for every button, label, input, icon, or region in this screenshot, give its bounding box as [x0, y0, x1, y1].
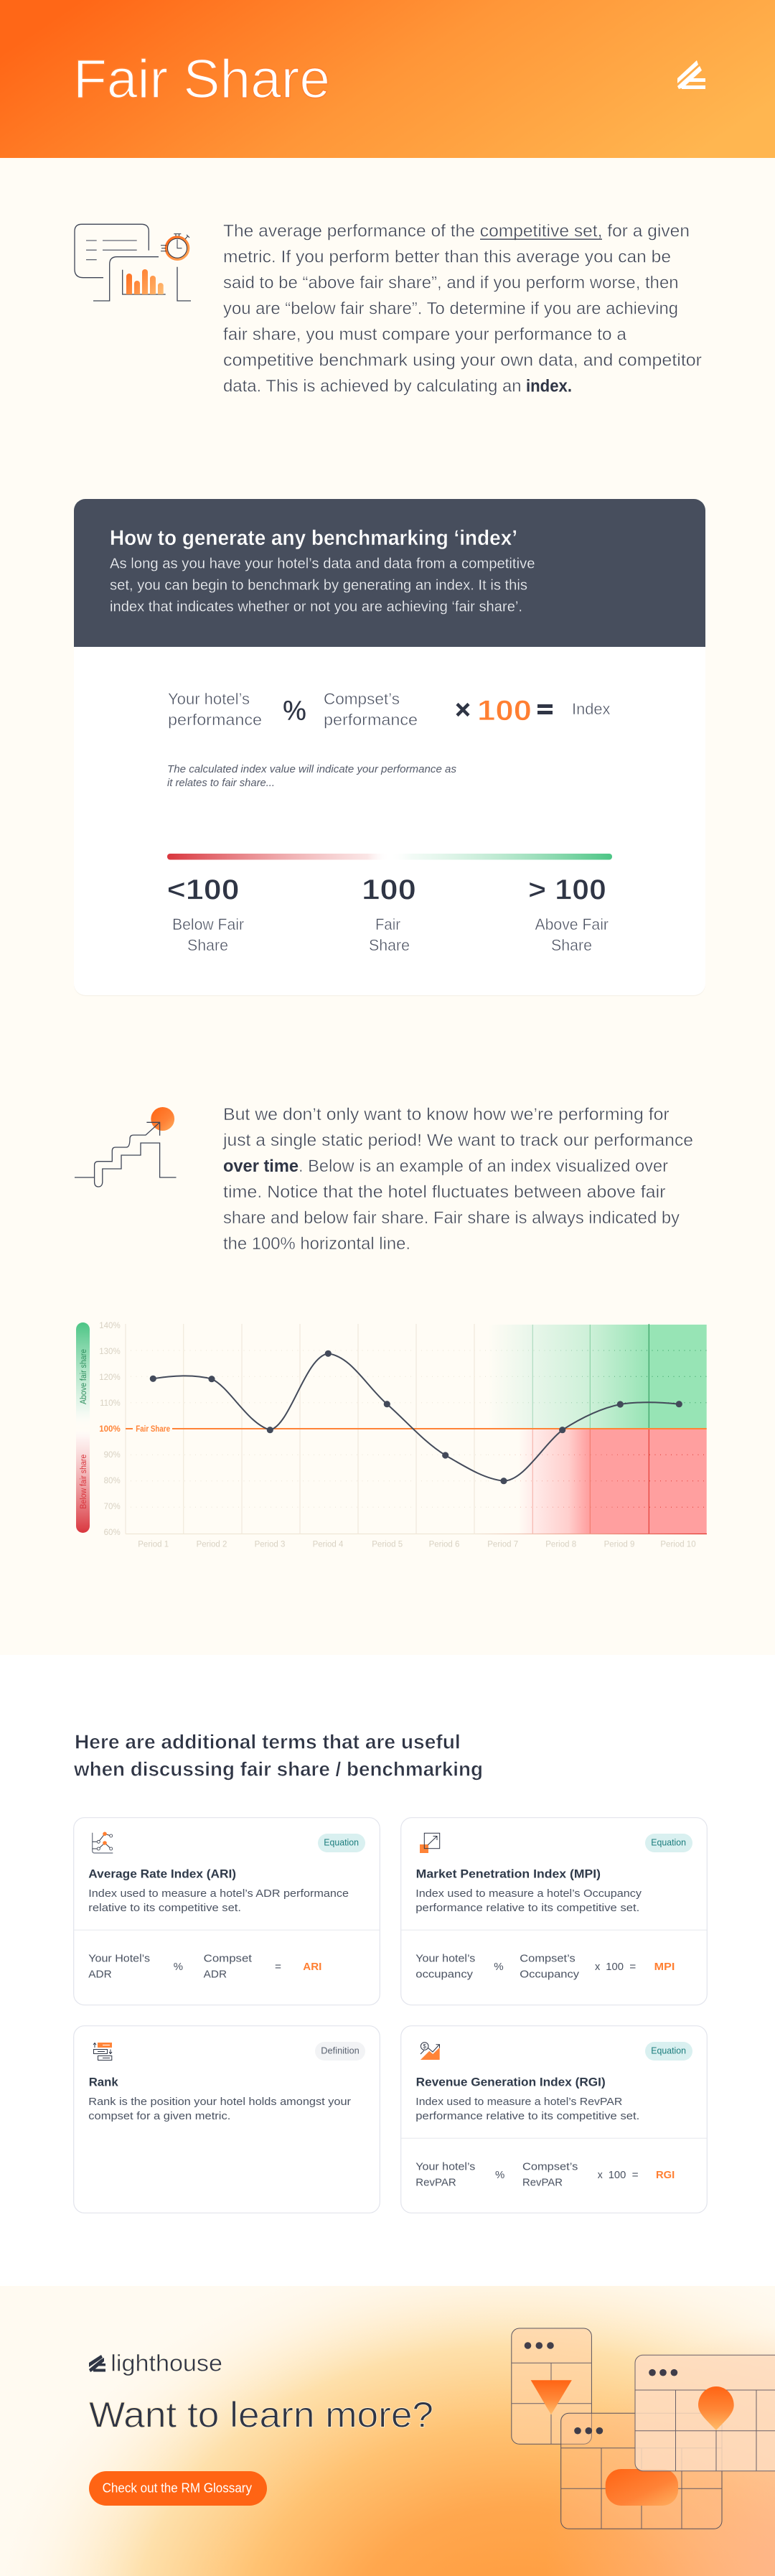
equation: RGI: RevPAR	[522, 2177, 563, 2189]
button: check out the RM glossary: Check out the RM Glossary	[103, 2481, 252, 2496]
equation: MPI: Occupancy	[520, 1969, 580, 1981]
index formula: 100	[477, 695, 532, 727]
x axis labels: Period 10	[660, 1541, 696, 1549]
y axis labels: 80%	[104, 1477, 121, 1485]
tag: equation	[318, 1834, 365, 1852]
y axis labels: 60%	[104, 1529, 121, 1537]
index formula: %	[283, 695, 306, 727]
tag: equation	[645, 2042, 692, 2061]
tag: definition	[315, 2042, 365, 2061]
tag: equation: Equation	[651, 1837, 686, 1848]
equation: RGI: %	[495, 2169, 504, 2181]
text block: definition: metric. If you perform better than this average you can be	[223, 247, 671, 266]
equation: RGI: Compset’s	[522, 2161, 578, 2173]
text block: over time: just a single static period! We want to track our performance	[222, 1131, 693, 1150]
panel header: set, you can begin to benchmark by generating an index. It is this	[110, 577, 527, 593]
scale: above fair share	[528, 874, 609, 954]
y axis labels: 130%	[99, 1348, 121, 1356]
icon: revenue chart	[421, 2043, 440, 2060]
illustration: window with rounded block	[561, 2413, 722, 2529]
text block: definition: said to be “above fair share”, and if you perform worse, then	[223, 273, 679, 292]
scale: below fair share: <100	[167, 874, 240, 906]
index formula	[168, 690, 610, 729]
equation: ARI: ADR	[88, 1969, 112, 1981]
scale: fair share: 100	[362, 874, 416, 906]
card: average rate index	[74, 1818, 380, 2005]
equation: ARI: Compset	[204, 1953, 253, 1965]
note: calculated index: it relates to fair share...	[167, 777, 275, 789]
text block: definition: fair share, you must compare your performance to a	[223, 325, 627, 344]
equation: ARI: Your Hotel’s	[88, 1953, 150, 1965]
tag: equation: Equation	[324, 1837, 359, 1848]
x axis labels: Period 1	[138, 1541, 169, 1549]
card: market penetration index: Market Penetration Index (MPI)	[416, 1867, 601, 1880]
equation: RGI: 100	[609, 2169, 626, 2181]
equation: RGI: Your hotel’s	[415, 2161, 475, 2173]
text block: definition: index.	[526, 376, 572, 396]
icon: line chart points	[93, 1832, 113, 1853]
equation: ARI: %	[174, 1961, 183, 1973]
x axis labels: Period 2	[197, 1541, 227, 1549]
card: average rate index: Index used to measure a hotel’s ADR performance	[88, 1887, 349, 1900]
logo: lighthouse: lighthouse	[111, 2351, 222, 2376]
equation: MPI	[415, 1953, 675, 1981]
above and below legend pill: Below fair share	[80, 1455, 88, 1509]
text block: definition: competitive benchmark using your own data, and competitor	[223, 350, 702, 370]
y axis labels: 90%	[104, 1451, 121, 1460]
red to green scale bar	[167, 854, 612, 860]
equation: ARI: =	[275, 1961, 281, 1973]
card: market penetration index: Index used to measure a hotel’s Occupancy	[415, 1887, 642, 1900]
text block: over time: . Below is an example of an index visualized over	[299, 1157, 668, 1176]
tag: equation	[645, 1834, 692, 1852]
intro section	[75, 221, 702, 396]
card: market penetration index	[401, 1818, 707, 2005]
panel header	[74, 499, 705, 647]
equation: RGI: =	[632, 2169, 639, 2181]
y axis labels	[99, 1322, 121, 1537]
text block: definition	[223, 221, 702, 396]
x axis labels: Period 6	[429, 1541, 459, 1549]
x axis labels: Period 8	[545, 1541, 576, 1549]
green solid fill	[649, 1325, 707, 1429]
equation: MPI: =	[629, 1961, 637, 1973]
equation: MPI: Compset’s	[520, 1953, 576, 1965]
scale: below fair share: Share	[187, 936, 228, 954]
card: rank: Rank	[89, 2075, 118, 2089]
text block: definition: data. This is achieved by calculating an	[223, 376, 522, 396]
icon: lighthouse logo white	[677, 60, 705, 89]
tag: equation: Equation	[651, 2045, 686, 2056]
card: market penetration index: performance relative to its competitive set.	[415, 1902, 639, 1914]
text block: over time: share and below fair share. Fair share is always indicated by	[223, 1208, 680, 1228]
scale: fair share: Fair	[375, 915, 400, 933]
card: revenue generation index: Revenue Generation Index (RGI)	[416, 2075, 606, 2089]
equation: RGI: RevPAR	[415, 2177, 456, 2189]
card: average rate index: Average Rate Index (ARI)	[88, 1867, 236, 1880]
above and below legend pill	[76, 1322, 90, 1533]
button: check out the RM glossary	[89, 2471, 267, 2506]
icon: report and stopwatch illustration	[75, 224, 191, 301]
x axis labels: Period 9	[604, 1541, 634, 1549]
fair share line: Fair Share	[136, 1425, 170, 1434]
green gradient fill	[488, 1325, 649, 1429]
text block: over time: time. Notice that the hotel fluctuates between above fair	[223, 1182, 666, 1202]
card: rank: compset for a given metric.	[88, 2110, 230, 2122]
note: calculated index	[167, 763, 456, 789]
index formula: Compset’s	[324, 690, 400, 708]
index formula: Index	[572, 700, 610, 718]
equation: ARI: ARI	[303, 1961, 321, 1973]
card: rank	[74, 2026, 380, 2213]
equation: MPI: %	[494, 1961, 504, 1973]
performance curve	[150, 1350, 682, 1484]
scale: fair share: Share	[369, 936, 410, 954]
y axis labels: 140%	[99, 1322, 121, 1330]
tag: definition: Definition	[321, 2045, 360, 2056]
text block: over time: over time	[223, 1157, 299, 1176]
section: tracking over time	[75, 1105, 693, 1254]
y axis labels: 70%	[104, 1503, 121, 1511]
icon: stairs with arrow	[75, 1107, 177, 1187]
y axis labels: 110%	[100, 1399, 121, 1408]
equation: MPI: Your hotel’s	[415, 1953, 475, 1965]
red gradient fill	[518, 1429, 590, 1534]
card: rank: Rank is the position your hotel holds amongst your	[88, 2096, 351, 2108]
panel header: index that indicates whether or not you are achieving ‘fair share’.	[110, 599, 522, 615]
y axis labels: 120%	[99, 1373, 121, 1382]
equation: MPI: 100	[606, 1961, 624, 1973]
scale: above fair share: Above Fair	[535, 915, 609, 933]
x axis labels: Period 3	[255, 1541, 285, 1549]
icon: revenue chart: $	[423, 2043, 426, 2050]
illustration: window with drop	[635, 2355, 775, 2471]
text block: definition: The average performance of the competitive set, for a given	[223, 221, 690, 241]
scale: above fair share: > 100	[528, 874, 606, 906]
index formula: Your hotel’s	[168, 690, 250, 708]
y axis labels: 100%	[99, 1425, 121, 1434]
x axis labels: Period 7	[487, 1541, 518, 1549]
scale: above fair share: Share	[551, 936, 592, 954]
card: revenue generation index	[401, 2026, 707, 2213]
card: revenue generation index: performance relative to its competitive set.	[415, 2110, 639, 2122]
panel: how to generate an index	[74, 499, 705, 997]
line chart: index over time	[76, 1322, 707, 1549]
title: Fair Share	[73, 49, 330, 110]
heading: additional terms: Here are additional terms that are useful	[75, 1731, 461, 1753]
white lower section background	[0, 1655, 775, 2287]
x axis labels: Period 4	[313, 1541, 344, 1549]
footer call to action	[0, 2286, 775, 2576]
x axis labels: Period 5	[372, 1541, 403, 1549]
heading: additional terms: when discussing fair share / benchmarking	[73, 1758, 483, 1781]
equation: MPI: x	[595, 1961, 601, 1973]
heading: additional terms	[73, 1731, 483, 1781]
card: revenue generation index: Index used to measure a hotel’s RevPAR	[415, 2096, 622, 2108]
equation: MPI: occupancy	[415, 1969, 474, 1981]
text block: definition: you are “below fair share”. To determine if you are achieving	[223, 299, 678, 318]
index formula: performance	[168, 711, 262, 729]
red solid fill	[590, 1429, 707, 1534]
card: average rate index: relative to its competitive set.	[88, 1902, 241, 1914]
note: calculated index: The calculated index value will indicate your performance as	[167, 763, 456, 775]
scale: fair share	[362, 874, 416, 954]
panel header: How to generate any benchmarking ‘index’	[110, 526, 517, 550]
text block: over time: the 100% horizontal line.	[223, 1234, 410, 1254]
equation: ARI	[88, 1953, 321, 1981]
equation: RGI: RGI	[656, 2169, 675, 2181]
heading: want to learn more: Want to learn more?	[89, 2395, 433, 2435]
x axis labels	[138, 1541, 696, 1549]
illustration: window with triangle	[512, 2328, 591, 2444]
text block: over time: But we don’t only want to know how we’re performing for	[223, 1105, 670, 1124]
equation: MPI: MPI	[654, 1961, 675, 1973]
icon: expanding square	[420, 1833, 440, 1853]
index formula: performance	[324, 711, 418, 729]
panel header: As long as you have your hotel’s data and data from a competitive	[110, 556, 535, 571]
scale: below fair share: Below Fair	[172, 915, 244, 933]
page background	[0, 0, 775, 1655]
header banner	[0, 0, 775, 158]
equation: RGI	[415, 2161, 675, 2189]
above and below legend pill: Above fair share	[80, 1349, 88, 1404]
equation: RGI: x	[598, 2169, 603, 2181]
icon: ranked rows	[93, 2043, 112, 2061]
equation: ARI: ADR	[204, 1969, 227, 1981]
text block: over time	[222, 1105, 693, 1254]
scale: below fair share	[167, 874, 244, 954]
